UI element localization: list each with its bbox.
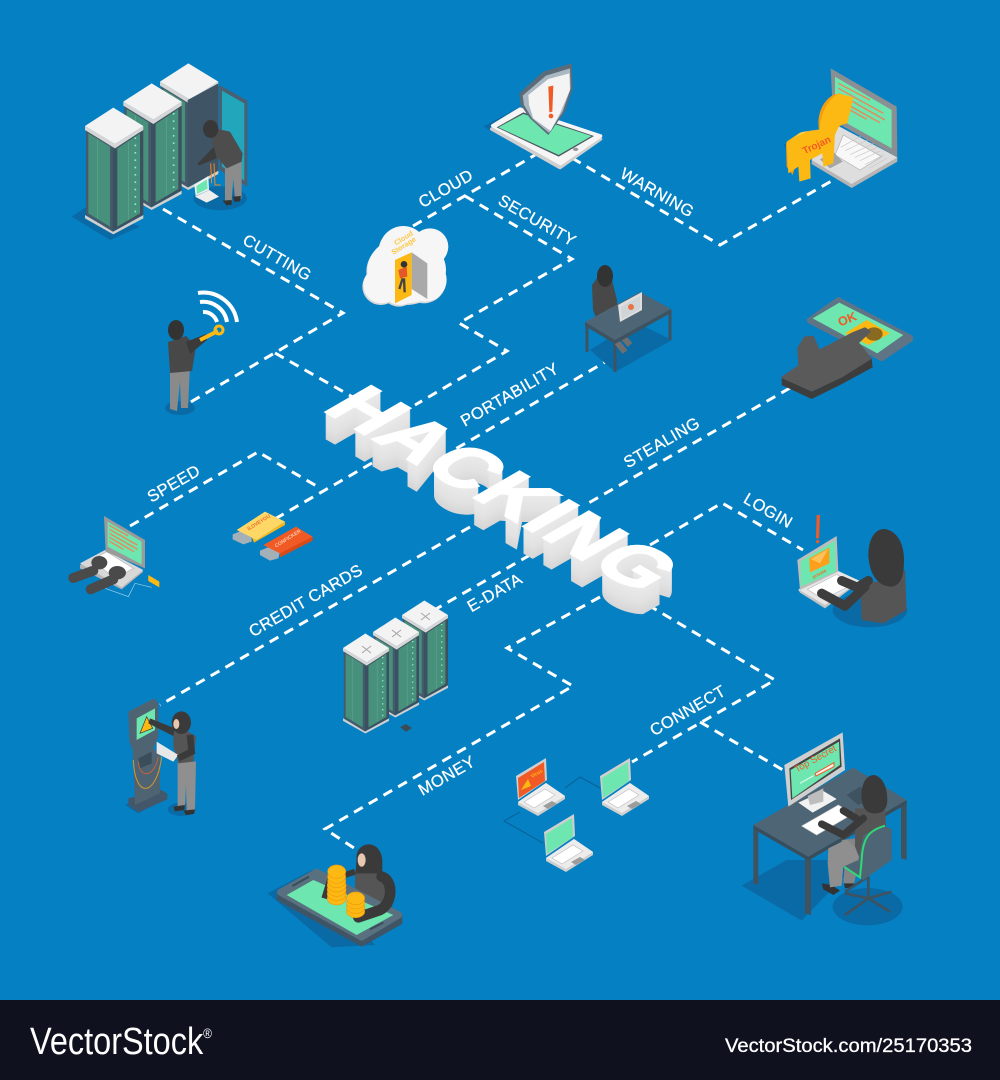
label: E-DATA: E-DATA bbox=[464, 570, 526, 616]
connector: credit cards bbox=[160, 527, 470, 705]
footer brand: ® bbox=[203, 1025, 213, 1041]
icon: networked laptops: Virus bbox=[530, 768, 544, 780]
icon: server racks with hacker bbox=[72, 63, 247, 240]
label: CLOUD: CLOUD bbox=[416, 166, 476, 212]
icon: cloud storage: Cloud bbox=[392, 229, 415, 247]
label: CUTTING: CUTTING bbox=[240, 231, 314, 285]
connector: stealing bbox=[585, 388, 790, 505]
connector: cutting to title bbox=[275, 353, 358, 400]
label: SPEED: SPEED bbox=[144, 462, 204, 506]
connector: speed bbox=[130, 452, 320, 526]
icon: cloud storage bbox=[362, 226, 448, 307]
connector: e-data bbox=[436, 555, 530, 609]
icon: networked laptops bbox=[504, 758, 649, 872]
connector: warning bbox=[572, 158, 842, 245]
icon: infected USB sticks bbox=[233, 512, 313, 561]
icon: tablet with warning shield bbox=[483, 63, 601, 168]
icon: infected USB sticks: ILOVEYOU bbox=[247, 513, 272, 532]
icon: hacker login at laptop bbox=[797, 515, 907, 627]
icon: hacker at desk with top secret monitor: Top Secret bbox=[793, 743, 839, 775]
label: PORTABILITY: PORTABILITY bbox=[458, 360, 562, 430]
footer bar bbox=[0, 1000, 1000, 1080]
label: SECURITY: SECURITY bbox=[495, 192, 579, 250]
icon: hand on tablet fingerprint: OK bbox=[836, 309, 860, 329]
icon: hacker stealing coins from smartphone bbox=[268, 844, 399, 947]
connector: security bbox=[415, 196, 572, 405]
icon: central server racks bbox=[343, 601, 448, 733]
connector: portability lower bbox=[268, 463, 372, 523]
icon: hand on tablet fingerprint bbox=[782, 298, 912, 399]
label: STEALING: STEALING bbox=[621, 414, 703, 472]
label: MONEY: MONEY bbox=[415, 753, 479, 799]
icon: hacker with wifi key bbox=[165, 293, 237, 415]
footer url: VectorStock.com/25170353 bbox=[725, 1036, 972, 1057]
label: CONNECT: CONNECT bbox=[647, 682, 729, 740]
icon: hacker at desk with top secret monitor bbox=[742, 732, 907, 925]
connector: login bbox=[650, 503, 803, 550]
icon: cloud storage: Storage bbox=[390, 235, 418, 257]
label: CREDIT CARDS: CREDIT CARDS bbox=[246, 561, 366, 641]
connector: connect to desk bbox=[700, 722, 783, 770]
connector: cutting bbox=[163, 209, 343, 403]
icon: infected USB sticks: CONFICKER bbox=[274, 528, 303, 549]
icon: hacker at desk with laptop bbox=[585, 265, 672, 372]
icon: laptop with trojan horse bbox=[783, 68, 897, 188]
icon: hacker login at laptop: private bbox=[811, 568, 828, 580]
label: WARNING: WARNING bbox=[617, 165, 697, 221]
label: LOGIN: LOGIN bbox=[740, 490, 796, 532]
icon: laptop with hacker hands and card bbox=[73, 516, 159, 597]
connector: connect bbox=[632, 605, 775, 762]
icon: hacker at ATM kiosk bbox=[125, 698, 196, 816]
title: HACKING bbox=[306, 375, 701, 603]
connector: portability upper bbox=[452, 358, 612, 451]
connector: money bbox=[325, 597, 600, 850]
icon: laptop with trojan horse: Trojan bbox=[801, 134, 833, 157]
footer brand: VectorStock bbox=[30, 1021, 233, 1063]
connector: cloud bbox=[413, 155, 535, 226]
